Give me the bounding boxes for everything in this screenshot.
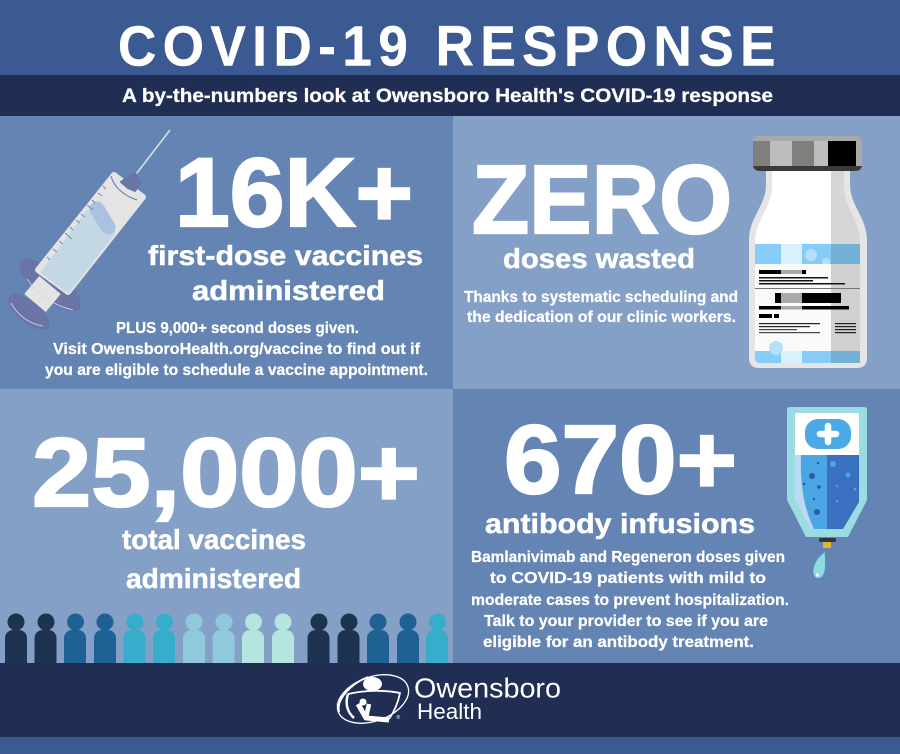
text: antibody treatment note: Talk to your provider to see if you are — [484, 613, 768, 630]
subtitle banner: A by-the-numbers look at Owensboro Health's COVID-19 response — [122, 86, 773, 107]
text: antibody treatment note: to COVID-19 patients with mild to — [490, 570, 766, 587]
text: antibody treatment note: eligible for an antibody treatment. — [483, 634, 754, 651]
heading: total vaccines administered: total vaccines — [122, 524, 306, 555]
heading: total vaccines administered — [122, 524, 306, 594]
text: scheduling note: the dedication of our clinic workers. — [467, 309, 736, 326]
logo: Owensboro Health: Health — [417, 699, 482, 724]
text: second doses note: PLUS 9,000+ second doses given. — [116, 320, 359, 337]
stat: 670+: 670+ — [504, 405, 737, 514]
stat: 16K+: 16K+ — [175, 138, 413, 247]
heading: doses wasted: doses wasted — [503, 243, 695, 274]
panel: first-dose vaccines — [0, 116, 453, 389]
text: second doses note: you are eligible to schedule a vaccine appointment. — [45, 362, 428, 379]
text: antibody treatment note: moderate cases to prevent hospitalization. — [471, 592, 789, 609]
heading: total vaccines administered: administered — [126, 563, 301, 594]
footer band — [0, 663, 900, 737]
text: scheduling note — [464, 289, 738, 326]
logo: Owensboro Health — [331, 666, 561, 732]
title: COVID-19 RESPONSE — [118, 14, 782, 78]
panel: total vaccines — [0, 389, 453, 663]
icon: vaccine vial — [749, 136, 867, 368]
logo: Owensboro Health: Owensboro — [414, 672, 561, 704]
heading: antibody infusions: antibody infusions — [485, 508, 755, 539]
text: antibody treatment note: Bamlanivimab and Regeneron doses given — [471, 549, 785, 566]
text: second doses note: Visit OwensboroHealth.org/vaccine to find out if — [53, 341, 421, 358]
panel: zero doses wasted — [453, 116, 900, 389]
stat: 25,000+: 25,000+ — [32, 418, 420, 527]
heading: first-dose vaccines administered — [148, 240, 423, 306]
text: scheduling note: Thanks to systematic scheduling and — [464, 289, 738, 306]
logo mark — [331, 666, 415, 732]
heading: first-dose vaccines administered: first-dose vaccines — [148, 240, 423, 271]
logo: Owensboro Health: ® — [396, 714, 400, 721]
panel: antibody infusions — [453, 389, 900, 663]
stat: ZERO: ZERO — [472, 145, 732, 254]
subtitle banner — [0, 75, 900, 116]
text: second doses note — [45, 320, 428, 379]
heading: first-dose vaccines administered: administered — [192, 275, 385, 306]
text: antibody treatment note — [471, 549, 789, 651]
icon: syringe — [3, 130, 170, 336]
icon: infusion bag — [787, 407, 867, 578]
icon row: people — [5, 614, 448, 663]
